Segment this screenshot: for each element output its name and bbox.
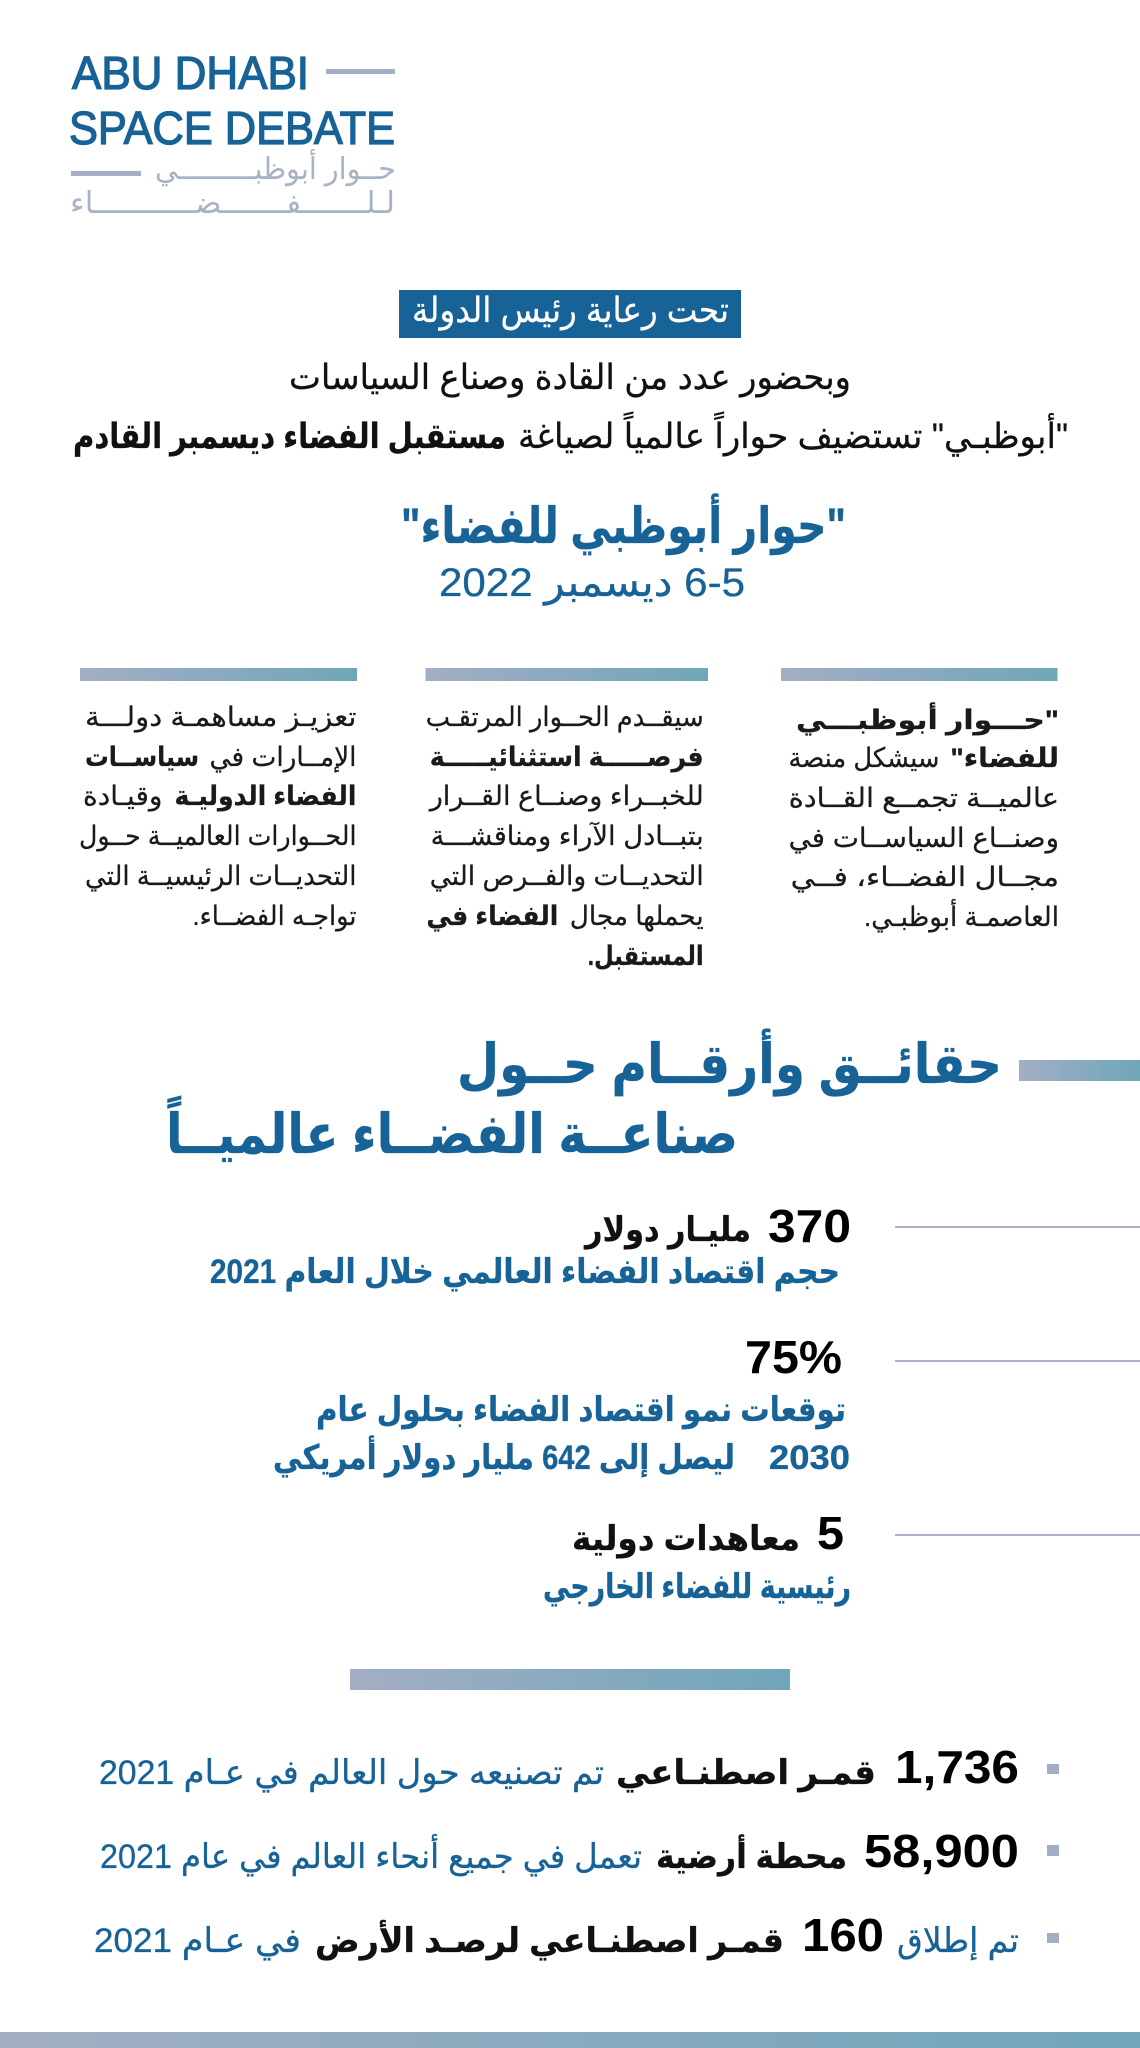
list item: 160 earth observation satellites: تم إطلاق bbox=[897, 1922, 1019, 1961]
list item: 58,900 ground stations bbox=[100, 1825, 1059, 1877]
list item: 58,900 ground stations: 58,900 bbox=[864, 1825, 1019, 1877]
panel: column left: التحديــات الرئيسيــة التي bbox=[85, 861, 356, 892]
list item: 160 earth observation satellites bbox=[94, 1909, 1059, 1961]
panel: column left: الفضاء الدوليـة bbox=[174, 781, 356, 812]
stat: 370 billion dollars: مليـار دولار bbox=[583, 1211, 751, 1250]
section heading: facts and figures bbox=[166, 1028, 1140, 1165]
stat: 370 billion dollars: حجم اقتصاد الفضاء العالمي خلال العام 2021 bbox=[210, 1253, 840, 1292]
panel: column middle: للخبــراء وصنــاع القــرار bbox=[428, 781, 704, 812]
stat: 75 percent: ليصل إلى 642 مليار دولار أمريكي bbox=[273, 1435, 735, 1478]
logo: Abu Dhabi Space Debate: SPACE DEBATE bbox=[69, 102, 395, 154]
panel: column middle: فرصـــــة استثنائيـــــة bbox=[430, 742, 704, 773]
panel: column left: وقيـادة bbox=[83, 781, 162, 812]
panel: column left: الحــوارات العالميــة حــول bbox=[79, 821, 356, 852]
panel: column right: عالميــة تجمــع القــادة bbox=[789, 783, 1059, 814]
event date: 6-5 ديسمبر 2022 bbox=[439, 561, 745, 606]
panel: column right: سيشكل منصة bbox=[788, 743, 940, 773]
list item: 58,900 ground stations: محطة أرضية bbox=[656, 1834, 847, 1876]
list item: 1,736 satellites: 1,736 bbox=[895, 1741, 1019, 1793]
stat: 5 treaties bbox=[543, 1507, 1140, 1607]
panel: column middle: بتبــادل الآراء ومناقشـــة bbox=[431, 821, 704, 852]
section heading: facts and figures: حقائــق وأرقــام حــول bbox=[457, 1028, 1002, 1097]
panel: column right: للفضاء" bbox=[950, 743, 1059, 773]
banner: under patronage: تحت رعاية رئيس الدولة bbox=[412, 291, 729, 331]
list item: 58,900 ground stations: تعمل في جميع أنحاء العالم في عام 2021 bbox=[100, 1834, 642, 1877]
panel: column left: سياســات bbox=[85, 742, 199, 772]
logo: Abu Dhabi Space Debate: حــوار أبوظبـــــــــي bbox=[155, 148, 396, 187]
panel: column middle bbox=[426, 668, 708, 971]
logo: Abu Dhabi Space Debate: لـلـــــــفـــــــضـــــــــــاء bbox=[70, 187, 395, 220]
panel: column right: وصنــاع السياســات في bbox=[789, 823, 1059, 854]
panel: column right: مجــال الفضــاء، فــي bbox=[791, 862, 1059, 893]
stat: 5 treaties: معاهدات دولية bbox=[572, 1520, 800, 1559]
footer bar bbox=[0, 2032, 1140, 2048]
panel: column middle: المستقبل. bbox=[588, 941, 704, 971]
panel: column left: الإمــارات في bbox=[210, 742, 356, 773]
intro line: Abu Dhabi hosts: "أبوظبـي" تستضيف حواراً عالمياً لصياغة bbox=[518, 411, 1068, 457]
intro line: attendance: وبحضور عدد من القادة وصناع السياسات bbox=[289, 358, 851, 398]
stat: 75 percent: توقعات نمو اقتصاد الفضاء بحلول عام bbox=[316, 1391, 846, 1430]
intro line: Abu Dhabi hosts bbox=[73, 411, 1068, 457]
list item: 160 earth observation satellites: في عـام 2021 bbox=[94, 1922, 301, 1961]
stat: 370 billion dollars bbox=[210, 1200, 1140, 1292]
panel: column middle: سيقــدم الحــوار المرتقـب bbox=[426, 702, 704, 733]
panel: column middle: التحديــات والفــرص التي bbox=[430, 861, 704, 892]
stat: 370 billion dollars: 370 bbox=[768, 1200, 851, 1252]
stat: 5 treaties: 5 bbox=[817, 1507, 844, 1559]
divider bar bbox=[350, 1669, 790, 1690]
panel: column right: العاصمـة أبوظبـي. bbox=[864, 898, 1059, 933]
stat: 75 percent bbox=[273, 1331, 1140, 1478]
list item: 1,736 satellites: تم تصنيعه حول العالم في عـام 2021 bbox=[99, 1754, 604, 1793]
panel: column right bbox=[781, 668, 1059, 933]
logo: Abu Dhabi Space Debate bbox=[69, 47, 396, 220]
stat: 75 percent: 2030 bbox=[769, 1439, 850, 1477]
event title: "حوار أبوظبي للفضاء" bbox=[401, 493, 846, 556]
logo: Abu Dhabi Space Debate: ABU DHABI bbox=[72, 47, 309, 99]
panel: column middle: الفضاء في bbox=[426, 901, 558, 932]
section heading: facts and figures: صناعــة الفضــاء عالميــاً bbox=[166, 1095, 738, 1165]
panel: column middle: يحملها مجال bbox=[570, 901, 704, 932]
list item: 160 earth observation satellites: 160 bbox=[802, 1909, 884, 1961]
panel: column left: تواجـه الفضــاء. bbox=[192, 901, 356, 932]
stat: 5 treaties: رئيسية للفضاء الخارجي bbox=[543, 1568, 851, 1607]
list item: 1,736 satellites: قمـر اصطنـاعي bbox=[616, 1754, 876, 1793]
panel: column left bbox=[79, 668, 357, 932]
intro line: Abu Dhabi hosts: مستقبل الفضاء ديسمبر القادم bbox=[73, 417, 506, 457]
list item: 160 earth observation satellites: قمـر اصطنـاعي لرصـد الأرض bbox=[315, 1919, 784, 1961]
panel: column right: "حـــوار أبوظبـــي bbox=[796, 702, 1059, 736]
panel: column left: تعزيـز مساهمـة دولـــة bbox=[85, 702, 356, 733]
stat: 75 percent: 75% bbox=[745, 1331, 842, 1383]
list item: 1,736 satellites bbox=[99, 1741, 1059, 1793]
